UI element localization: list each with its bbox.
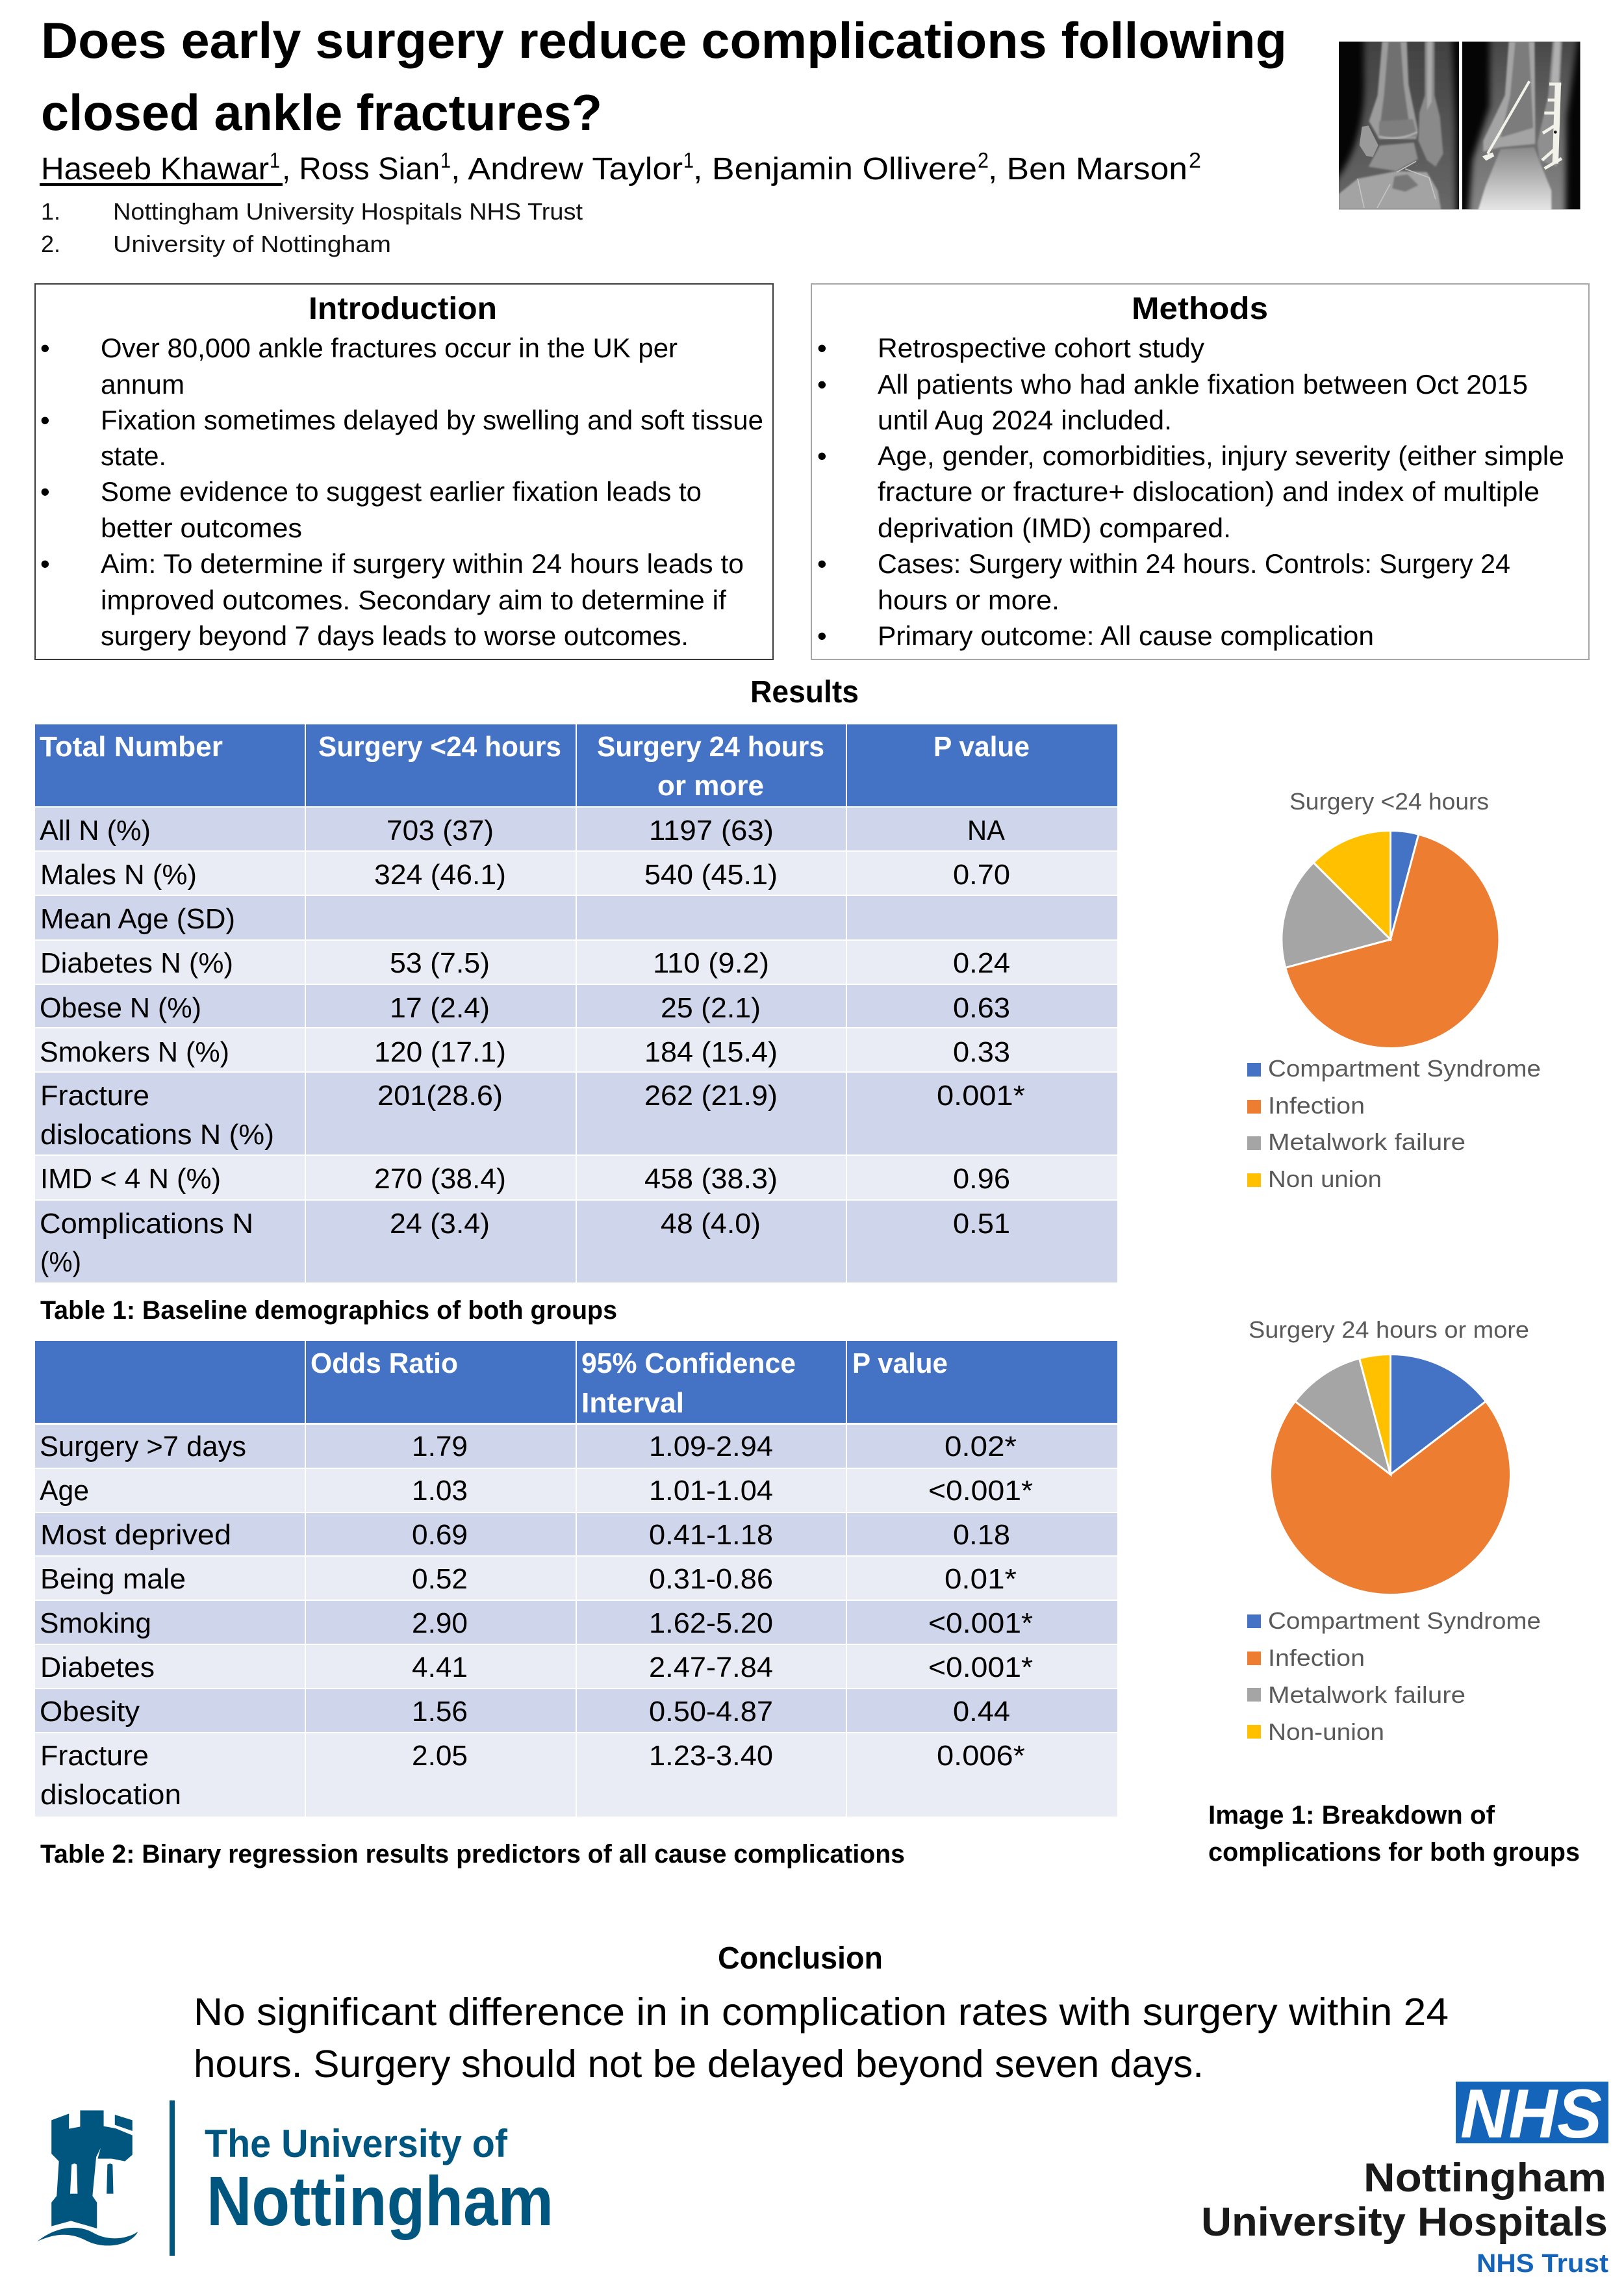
row: males: 324 (46.1) [374,860,506,891]
logo: university of nottingham: Nottingham [207,2162,553,2240]
pie chart: surgery under 24 hours [1247,788,1541,1192]
heading: methods: Methods [1132,292,1268,326]
legend: surgery under 24 hours: Non union [1268,1166,1382,1192]
row: imd: 270 (38.4) [374,1164,506,1195]
pie chart: surgery 24 hours or more: Surgery 24 hours or more [1249,1316,1529,1343]
panel: methods [811,284,1589,659]
authors: , Ross Sian [282,152,440,186]
row: age: 1.01-1.04 [649,1475,773,1507]
row: smoking [35,1601,1117,1644]
heading: introduction: Introduction [309,292,497,326]
bullet list: introduction: state. [101,440,166,471]
caption: image 1 [1208,1801,1580,1867]
row: complications: 48 (4.0) [661,1208,761,1240]
row: all: NA [967,815,1005,847]
bullet list: introduction: Fixation sometimes delayed by swelling and soft tissue [101,405,763,435]
row: smoking: Smoking [40,1608,151,1639]
logo: university of nottingham [37,2100,553,2256]
row: males: 0.70 [953,860,1010,891]
row: being male: Being male [40,1564,186,1595]
caption: image 1: Image 1: Breakdown of [1208,1801,1495,1830]
row: surgery over 7 days [35,1425,1117,1468]
row: all: 703 (37) [387,815,494,847]
bullet list: introduction: annum [101,369,184,400]
row: most deprived: 0.41-1.18 [649,1520,773,1551]
row: most deprived: 0.69 [412,1520,468,1551]
affiliations: 1. [41,198,60,225]
bullet list: introduction: improved outcomes. Secondary aim to determine if [101,585,726,615]
bullet list: introduction: Aim: To determine if surgery within 24 hours leads to [101,548,744,579]
row: diabetes: <0.001* [928,1652,1033,1683]
legend: surgery under 24 hours [1247,1055,1541,1192]
authors: , Andrew Taylor [451,152,683,186]
bullet list: methods [817,333,1564,651]
affiliations: 2. [41,231,60,257]
row: mean age: Mean Age (SD) [40,904,235,935]
authors [40,148,1201,186]
image: ankle x-rays before and after fixation [1339,42,1580,209]
legend: surgery 24 hours or more [1247,1607,1541,1745]
table 1 header: Surgery <24 hours [318,731,561,763]
row: obese: 17 (2.4) [390,993,490,1024]
row: smoking: <0.001* [928,1608,1033,1639]
table 2 header: 95% Confidence [581,1347,796,1379]
legend: surgery under 24 hours: Compartment Syndrome [1268,1055,1541,1082]
row: smokers: 120 (17.1) [374,1037,506,1068]
title: closed ankle fractures? [41,84,602,141]
title [41,12,1287,141]
affiliations [41,198,583,257]
row: males [35,852,1117,895]
authors: 1 [440,148,451,172]
row: surgery over 7 days: Surgery >7 days [40,1431,246,1462]
row: being male [35,1557,1117,1600]
row: all: All N (%) [40,815,151,847]
table 1 header: P value [933,731,1030,763]
bullet list: introduction [40,333,763,651]
bullet list: introduction: surgery beyond 7 days leads to worse outcomes. [101,620,689,651]
table 1: baseline demographics [35,724,1117,1282]
row: being male: 0.52 [412,1564,468,1595]
bullet list: methods: hours or more. [878,585,1059,615]
row: surgery over 7 days: 0.02* [945,1431,1017,1462]
caption: table 2: Table 2: Binary regression results predictors of all cause complications [40,1840,905,1869]
row: smokers: 184 (15.4) [644,1037,778,1068]
panel: introduction [35,284,773,659]
bullet list: introduction: better outcomes [101,513,302,543]
row: fracture dislocations: 0.001* [937,1080,1025,1112]
row: surgery over 7 days: 1.09-2.94 [649,1431,773,1462]
row: age: <0.001* [928,1475,1033,1507]
authors: 1 [683,148,694,172]
caption: table 1: Table 1: Baseline demographics of both groups [40,1296,617,1325]
table 2 header: Odds Ratio [311,1347,458,1379]
table 1 header: Surgery 24 hours [597,731,824,763]
row: fracture dislocations: Fracture [40,1080,149,1112]
conclusion text [194,1991,1449,2086]
row: most deprived: 0.18 [953,1520,1010,1551]
row: complications: Complications N [40,1208,253,1240]
logo: nhs trust [1201,2074,1608,2278]
row: complications: 0.51 [953,1208,1010,1240]
bullet list: methods: • [817,333,827,363]
bullet list: introduction: • [40,476,50,507]
authors: 2 [978,148,989,172]
row: fracture dislocation: dislocation [40,1779,181,1811]
row: all: 1197 (63) [649,815,774,847]
row: most deprived: Most deprived [40,1520,231,1551]
table 2 header [35,1341,1117,1423]
authors: , Benjamin Ollivere [693,152,977,186]
row: imd: IMD < 4 N (%) [40,1164,221,1195]
bullet list: methods: • [817,548,827,579]
bullet list: introduction: • [40,548,50,579]
table 1 header: or more [657,770,764,802]
authors: 1 [270,148,280,172]
row: obesity: 0.44 [953,1696,1010,1728]
row: diabetes: Diabetes N (%) [40,948,233,979]
row: males: Males N (%) [40,860,197,891]
bullet list: introduction: • [40,405,50,435]
heading: results: Results [750,675,859,709]
row: being male: 0.01* [945,1564,1017,1595]
bullet list: methods: until Aug 2024 included. [878,405,1172,435]
row: fracture dislocations: 262 (21.9) [644,1080,778,1112]
bullet list: methods: Cases: Surgery within 24 hours. Controls: Surgery 24 [878,548,1510,579]
row: obesity: 0.50-4.87 [649,1696,773,1728]
row: all [35,808,1117,850]
row: obese: 25 (2.1) [661,993,761,1024]
legend: surgery under 24 hours: Metalwork failure [1268,1129,1465,1155]
bullet list: introduction: Some evidence to suggest earlier fixation leads to [101,476,702,507]
row: fracture dislocation: 0.006* [937,1741,1025,1772]
row: imd [35,1156,1117,1199]
row: surgery over 7 days: 1.79 [412,1431,468,1462]
authors: 2 [1189,148,1201,172]
row: males: 540 (45.1) [644,860,778,891]
row: complications [35,1201,1117,1282]
bullet list: methods: • [817,440,827,471]
table 2 header: Interval [581,1387,684,1419]
legend: surgery 24 hours or more: Non-union [1268,1718,1384,1745]
bullet list: methods: • [817,620,827,651]
title: Does early surgery reduce complications following [41,12,1287,69]
table 1 header [35,724,1117,806]
row: age [35,1469,1117,1512]
row: diabetes [35,941,1117,984]
row: most deprived [35,1513,1117,1555]
icon: castle tower and river [37,2110,138,2245]
bullet list: introduction: • [40,333,50,363]
row: imd: 0.96 [953,1164,1010,1195]
row: smokers [35,1028,1117,1071]
affiliations: University of Nottingham [113,231,391,257]
row: imd: 458 (38.3) [644,1164,778,1195]
row: age: 1.03 [412,1475,468,1507]
logo: nhs trust: Nottingham [1364,2156,1606,2200]
row: obesity: Obesity [40,1696,140,1728]
row: obesity [35,1689,1117,1732]
row: age: Age [40,1475,89,1507]
bullet list: methods: Primary outcome: All cause complication [878,620,1374,651]
row: smokers: 0.33 [953,1037,1010,1068]
row: complications: (%) [40,1247,81,1278]
conclusion text: hours. Surgery should not be delayed beyond seven days. [194,2043,1204,2086]
logo: nhs trust: NHS [1460,2074,1602,2152]
pie chart: surgery 24 hours or more [1247,1316,1541,1745]
row: smoking: 2.90 [412,1608,468,1639]
row: diabetes [35,1645,1117,1688]
row: fracture dislocation: 2.05 [412,1741,468,1772]
heading: conclusion: Conclusion [718,1941,883,1976]
bullet list: introduction: Over 80,000 ankle fractures occur in the UK per [101,333,678,363]
row: diabetes: 2.47-7.84 [649,1652,773,1683]
row: smoking: 1.62-5.20 [649,1608,773,1639]
row: diabetes: 53 (7.5) [390,948,490,979]
authors: Haseeb Khawar [41,152,269,186]
row: being male: 0.31-0.86 [649,1564,773,1595]
legend: surgery 24 hours or more: Compartment Syndrome [1268,1607,1541,1634]
affiliations: Nottingham University Hospitals NHS Trust [113,198,583,225]
table 1 header: Total Number [40,731,223,763]
row: obese [35,985,1117,1027]
bullet list: methods: Retrospective cohort study [878,333,1204,363]
row: fracture dislocation [35,1733,1117,1817]
legend: surgery under 24 hours: Infection [1268,1092,1365,1119]
row: obese: 0.63 [953,993,1010,1024]
row: complications: 24 (3.4) [390,1208,490,1240]
row: diabetes: Diabetes [40,1652,155,1683]
row: diabetes: 0.24 [953,948,1010,979]
table 2 header: P value [852,1347,948,1379]
pie chart: surgery under 24 hours: Surgery <24 hours [1289,788,1489,815]
bullet list: methods: • [817,369,827,400]
bullet list: methods: deprivation (IMD) compared. [878,513,1231,543]
bullet list: methods: All patients who had ankle fixation between Oct 2015 [878,369,1528,400]
row: diabetes: 110 (9.2) [653,948,769,979]
logo: nhs trust: University Hospitals [1201,2200,1608,2245]
row: fracture dislocations: 201(28.6) [377,1080,503,1112]
bullet list: methods: fracture or fracture+ dislocation) and index of multiple [878,476,1540,507]
row: fracture dislocation: 1.23-3.40 [649,1741,773,1772]
conclusion text: No significant difference in in complication rates with surgery within 24 [194,1991,1449,2034]
table 2: regression results [35,1341,1117,1817]
logo: university of nottingham: The University of [205,2122,508,2165]
row: fracture dislocations: dislocations N (%) [40,1119,274,1151]
row: fracture dislocations [35,1073,1117,1154]
legend: surgery 24 hours or more: Metalwork failure [1268,1681,1465,1708]
bullet list: methods: Age, gender, comorbidities, injury severity (either simple [878,440,1564,471]
row: mean age [35,896,1117,939]
row: smokers: Smokers N (%) [40,1037,229,1068]
caption: image 1: complications for both groups [1208,1838,1580,1867]
row: obesity: 1.56 [412,1696,468,1728]
legend: surgery 24 hours or more: Infection [1268,1644,1365,1671]
logo: nhs trust: NHS Trust [1477,2249,1608,2278]
authors: , Ben Marson [988,152,1187,186]
row: diabetes: 4.41 [412,1652,468,1683]
row: fracture dislocation: Fracture [40,1741,149,1772]
row: obese: Obese N (%) [40,993,201,1024]
